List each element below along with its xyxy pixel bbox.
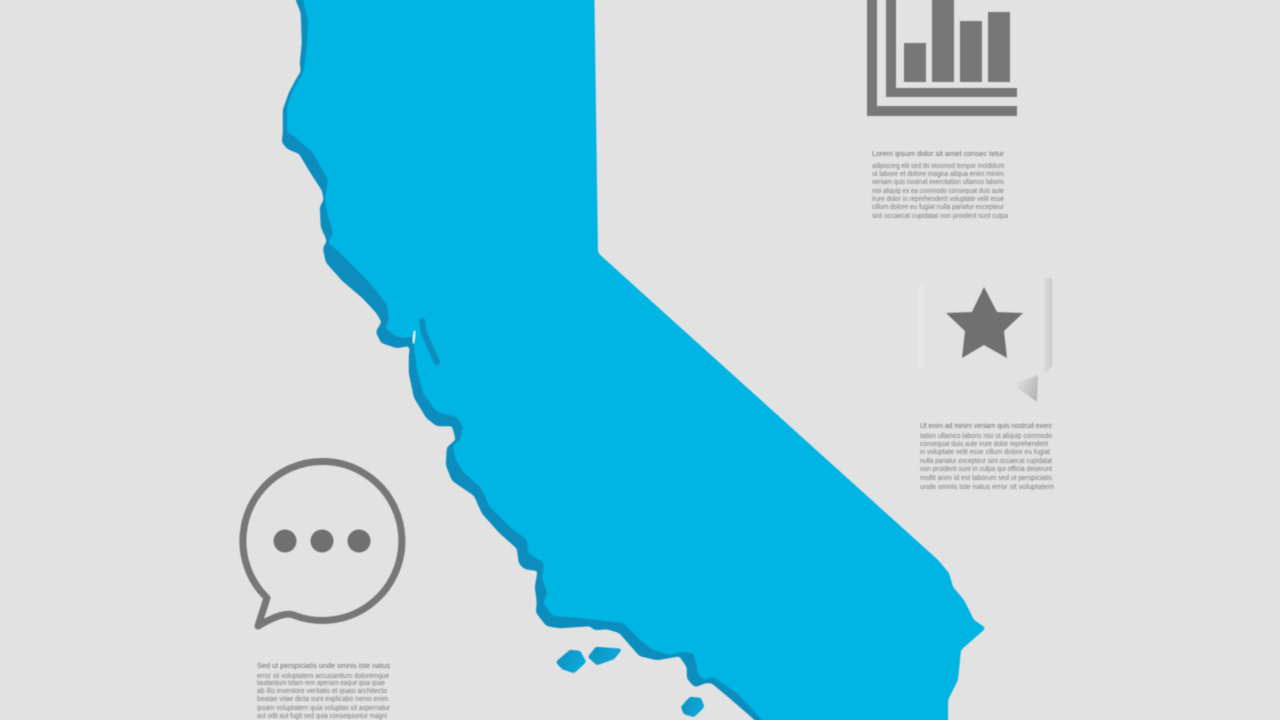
text block: speech caption [257,663,391,720]
text block: chart caption: nisi aliquip ex ea commodo consequat duis aute [872,188,1004,195]
island two [588,647,622,665]
map land surface [287,0,986,720]
dot one [274,530,296,552]
bookmark fold [1012,375,1038,402]
text block: chart caption: irure dolor in reprehenderit voluptate velit esse [872,196,1004,203]
text block: star caption: non proident sunt in culpa qui officia deserunt [920,466,1052,473]
bar one [904,43,926,82]
text block: speech caption: beatae vitae dicta sunt explicabo nemo enim [257,696,388,703]
bookmark right band [1043,278,1052,376]
text block: star caption: nulla pariatur excepteur sint occaecat cupidatat [920,458,1052,465]
icon: bar chart [867,0,1017,116]
text block: speech caption: aut odit aut fugit sed quia consequuntur magni [257,713,387,720]
bubble outline [243,461,402,626]
bar three [960,21,982,82]
dot two [310,530,334,552]
island three [681,697,704,717]
text block: chart caption: ut labore et dolore magna aliqua enim minim [872,171,1004,178]
text block: star caption: tation ullamco laboris nisi ut aliquip commodo [920,433,1052,440]
icon: star bookmark [918,278,1052,402]
bay gap [413,332,415,342]
channel islands [556,647,704,717]
inner axis [886,0,1017,97]
text block: chart caption: Lorem ipsum dolor sit amet consec tetur [872,151,1005,158]
star [946,287,1023,358]
text block: speech caption: error sit voluptatem accusantium doloremque [257,673,389,680]
text block: star caption: consequat duis aute irure dolor reprehenderit [920,441,1048,448]
text block: speech caption: Sed ut perspiciatis unde omnis iste natus [257,663,391,670]
text block: chart caption: cillum dolore eu fugiat nulla pariatur excepteur [872,204,1005,211]
icon: speech bubble [243,461,402,626]
text block: chart caption: veniam quis nostrud exercitation ullamco laboris [872,179,1004,186]
bar four [988,12,1010,82]
outer axis [867,0,1017,116]
text block: chart caption: sint occaecat cupidatat non proident sunt culpa [872,213,1008,220]
bookmark left edge [918,285,924,370]
text block: star caption: in voluptate velit esse cillum dolore eu fugiat [920,449,1050,456]
text block: star caption: unde omnis iste natus error sit voluptatem [920,484,1054,491]
text block: speech caption: laudantium totam rem aperiam eaque ipsa quae [257,680,385,687]
text block: speech caption: ipsam voluptatem quia voluptas sit aspernatur [257,705,391,712]
California map [283,0,986,720]
text block: star caption: mollit anim id est laborum sed ut perspiciatis [920,475,1052,482]
text block: chart caption [872,151,1008,220]
text block: star caption: Ut enim ad minim veniam quis nostrud exerc [920,423,1052,430]
dot three [348,530,370,552]
map coastline depth shadow [283,0,800,720]
island one [556,650,586,673]
text block: chart caption: adipiscing elit sed do eiusmod tempor incididunt [872,163,1004,170]
text block: speech caption: ab illo inventore veritatis et quasi architecto [257,688,387,695]
text block: star caption [920,423,1054,491]
bay inlet shadow [422,321,437,362]
bar two [932,0,954,82]
